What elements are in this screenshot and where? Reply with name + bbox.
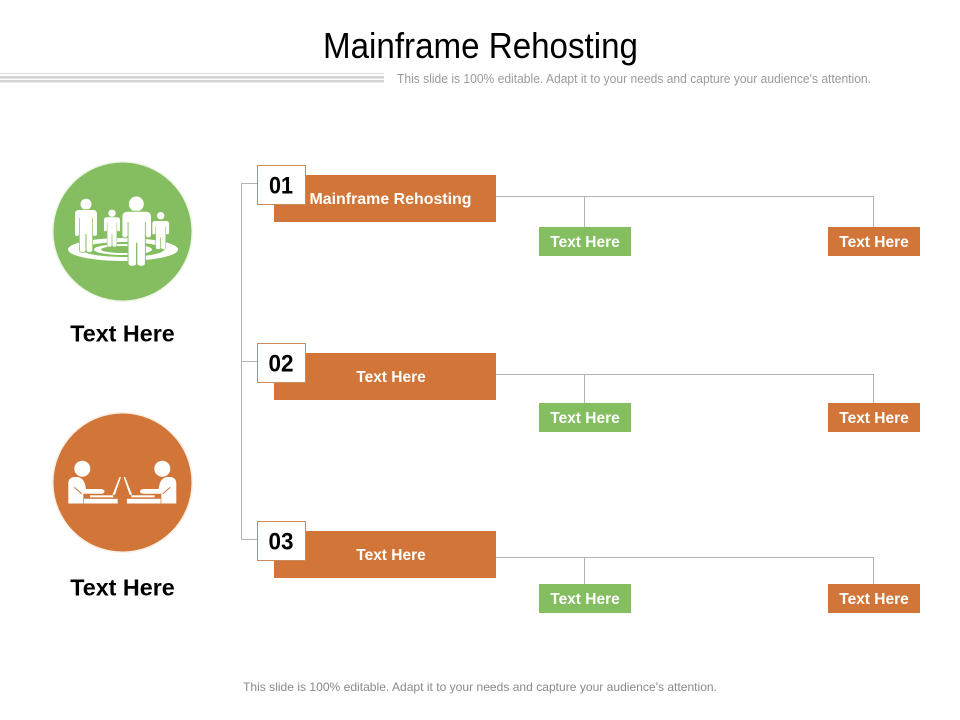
orange box 03 (828, 584, 920, 613)
main bar 01 (274, 175, 496, 222)
green box 01: Text Here (550, 234, 620, 251)
label: second circle: Text Here (70, 574, 175, 600)
main bar 02: Text Here (356, 369, 426, 386)
number badge 02 (258, 344, 306, 382)
main bar 03 (274, 531, 496, 578)
main bar 03: Text Here (356, 547, 426, 564)
tree connector lines (242, 184, 874, 584)
number badge 02: 02 (268, 350, 294, 378)
main bar 02 (274, 353, 496, 400)
orange box 01 (828, 227, 920, 256)
title: Mainframe Rehosting (323, 25, 638, 66)
icon: people standing on target (68, 196, 178, 266)
orange box 03: Text Here (839, 591, 909, 608)
row 02 (258, 344, 920, 432)
orange box 01: Text Here (839, 234, 909, 251)
label: first circle: Text Here (70, 320, 175, 346)
orange box 02: Text Here (839, 410, 909, 427)
green box 03: Text Here (550, 591, 620, 608)
green box 01 (539, 227, 631, 256)
number badge 03: 03 (268, 528, 294, 556)
main bar 01: Mainframe Rehosting (310, 191, 472, 208)
footer note: This slide is 100% editable. Adapt it to your needs and capture your audience's attention. (243, 680, 717, 694)
subtitle: This slide is 100% editable. Adapt it to your needs and capture your audience's attention. (397, 72, 871, 86)
orange box 02 (828, 403, 920, 432)
row 01 (258, 166, 920, 256)
panel: green circle with people icon (52, 161, 193, 302)
panel: orange circle with laptop icon (52, 412, 193, 553)
green box 03 (539, 584, 631, 613)
icon: two people at laptops (68, 461, 176, 504)
green box 02 (539, 403, 631, 432)
green box 02: Text Here (550, 410, 620, 427)
number badge 01 (258, 166, 306, 204)
number badge 03 (258, 522, 306, 560)
number badge 01: 01 (269, 172, 293, 200)
row 03 (258, 522, 920, 613)
